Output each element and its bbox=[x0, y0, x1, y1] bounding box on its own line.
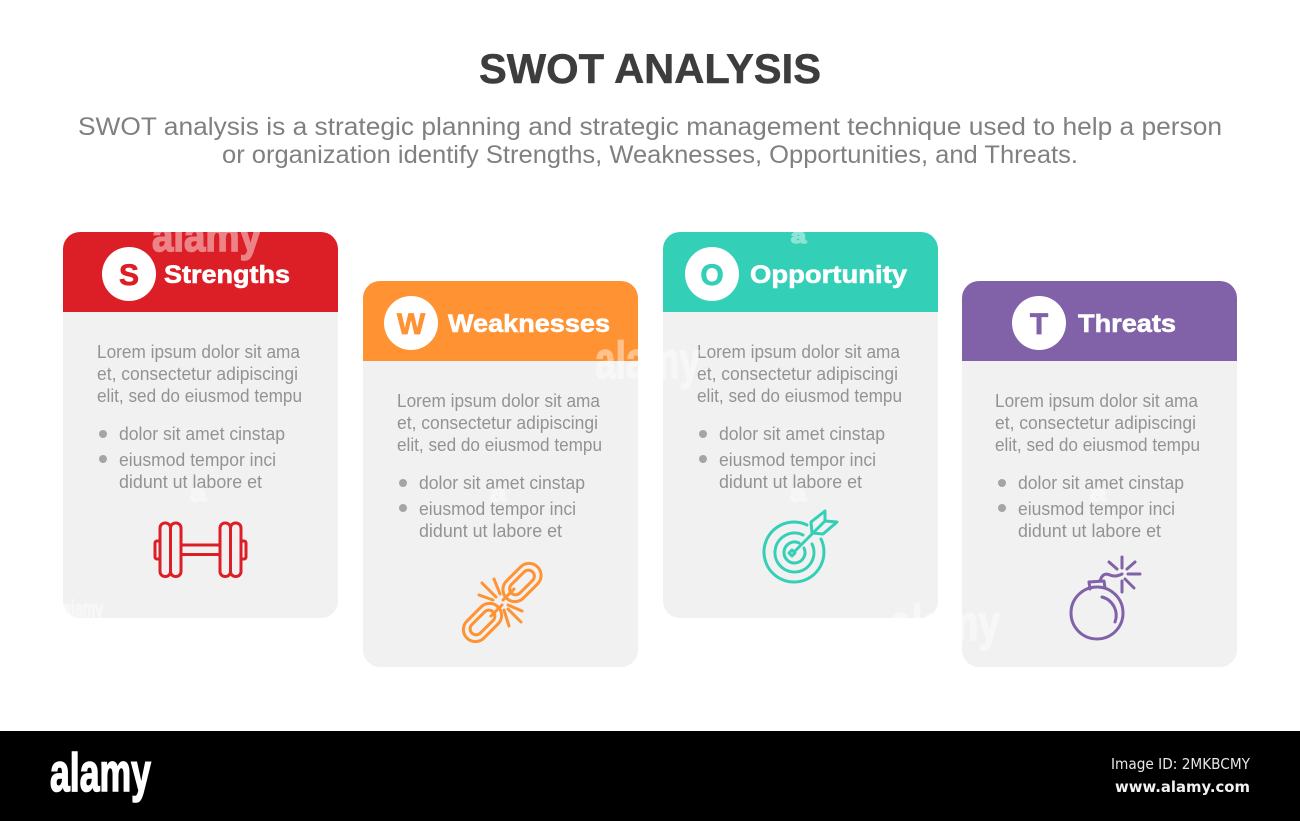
weaknesses description bbox=[397, 391, 602, 455]
panel: opportunity bbox=[663, 232, 938, 618]
threats description: Lorem ipsum dolor sit ama bbox=[995, 391, 1199, 411]
weaknesses letter badge: W bbox=[397, 308, 426, 341]
threats description: elit, sed do eiusmod tempu bbox=[995, 435, 1200, 455]
panel: weaknesses bbox=[363, 281, 638, 667]
strengths heading: Strengths bbox=[164, 261, 290, 289]
threats bullet list: didunt ut labore et bbox=[1018, 521, 1161, 541]
weaknesses header band bbox=[363, 281, 638, 361]
watermarks: alamy bbox=[890, 595, 1000, 651]
threats letter badge: T bbox=[1030, 308, 1048, 341]
threats header band bbox=[962, 281, 1237, 361]
strengths description: Lorem ipsum dolor sit ama bbox=[97, 342, 301, 362]
strengths bullet list: eiusmod tempor inci bbox=[119, 450, 276, 470]
icon: dumbbell bbox=[155, 523, 246, 576]
website: www.alamy.com bbox=[1115, 778, 1250, 796]
title: SWOT ANALYSIS bbox=[479, 45, 821, 92]
strengths description bbox=[97, 342, 302, 406]
weaknesses description: et, consectetur adipiscingi bbox=[397, 413, 598, 433]
opportunity description: et, consectetur adipiscingi bbox=[697, 364, 898, 384]
strengths bullet list bbox=[99, 424, 285, 492]
panel: strengths bbox=[63, 232, 338, 618]
opportunity header band bbox=[663, 232, 938, 312]
image id: Image ID: 2MKBCMY bbox=[1111, 755, 1251, 773]
opportunity description: Lorem ipsum dolor sit ama bbox=[697, 342, 901, 362]
weaknesses description: Lorem ipsum dolor sit ama bbox=[397, 391, 601, 411]
watermarks: a bbox=[791, 226, 807, 248]
watermarks: alamy bbox=[63, 596, 103, 623]
threats bullet list: eiusmod tempor inci bbox=[1018, 499, 1175, 519]
watermarks: alamy bbox=[152, 212, 261, 261]
watermarks: a bbox=[190, 480, 207, 507]
watermarks: a bbox=[790, 480, 807, 507]
footer logo: alamy bbox=[50, 743, 151, 803]
watermarks: a bbox=[490, 480, 507, 507]
weaknesses bullet list: eiusmod tempor inci bbox=[419, 499, 576, 519]
threats bullet list bbox=[998, 473, 1184, 541]
icon: target with arrow bbox=[764, 511, 837, 582]
opportunity bullet list: didunt ut labore et bbox=[719, 472, 862, 492]
threats description: et, consectetur adipiscingi bbox=[995, 413, 1196, 433]
strengths letter badge bbox=[102, 247, 156, 301]
threats letter badge bbox=[1012, 296, 1066, 350]
threats heading: Threats bbox=[1078, 310, 1176, 338]
watermarks bbox=[152, 232, 1102, 489]
strengths header band bbox=[63, 232, 338, 312]
strengths description: et, consectetur adipiscingi bbox=[97, 364, 298, 384]
opportunity description: elit, sed do eiusmod tempu bbox=[697, 386, 902, 406]
footer bar bbox=[0, 731, 1300, 821]
icon: bomb bbox=[1071, 557, 1140, 639]
opportunity bullet list bbox=[699, 424, 885, 492]
opportunity description bbox=[697, 342, 902, 406]
weaknesses bullet list: dolor sit amet cinstap bbox=[419, 473, 585, 493]
panel: threats bbox=[962, 281, 1237, 667]
subtitle text: or organization identify Strengths, Weaknesses, Opportunities, and Threats. bbox=[222, 141, 1078, 169]
threats description bbox=[995, 391, 1200, 455]
watermarks: a bbox=[1090, 480, 1107, 507]
strengths description: elit, sed do eiusmod tempu bbox=[97, 386, 302, 406]
strengths bullet list: dolor sit amet cinstap bbox=[119, 424, 285, 444]
icon: broken chain bbox=[458, 558, 546, 647]
subtitle text: SWOT analysis is a strategic planning and strategic management technique used to help a person bbox=[78, 113, 1222, 141]
weaknesses description: elit, sed do eiusmod tempu bbox=[397, 435, 602, 455]
threats bullet list: dolor sit amet cinstap bbox=[1018, 473, 1184, 493]
weaknesses bullet list: didunt ut labore et bbox=[419, 521, 562, 541]
weaknesses letter badge bbox=[384, 296, 438, 350]
opportunity heading: Opportunity bbox=[750, 261, 907, 289]
weaknesses bullet list bbox=[399, 473, 585, 541]
strengths bullet list: didunt ut labore et bbox=[119, 472, 262, 492]
opportunity letter badge: O bbox=[700, 259, 724, 292]
opportunity bullet list: dolor sit amet cinstap bbox=[719, 424, 885, 444]
subtitle text bbox=[78, 113, 1222, 169]
opportunity letter badge bbox=[685, 247, 739, 301]
watermarks: alamy bbox=[595, 332, 700, 390]
opportunity bullet list: eiusmod tempor inci bbox=[719, 450, 876, 470]
weaknesses heading: Weaknesses bbox=[448, 310, 610, 338]
strengths letter badge: S bbox=[119, 259, 139, 292]
